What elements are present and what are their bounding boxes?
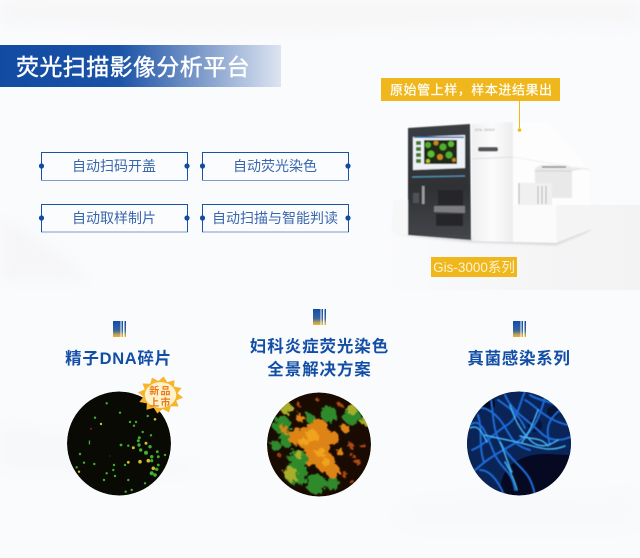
fluorescent micrograph: blue hyphae: [467, 392, 575, 500]
instrument illustration: Gis-3000: [475, 127, 495, 132]
feature box: 自动扫描与智能判读: 自动扫描与智能判读: [212, 210, 338, 226]
fluorescent micrograph: orange and green clusters: [267, 392, 371, 496]
heading: 妇科炎症荧光染色: [250, 336, 389, 356]
feature box: 自动扫码开盖: [39, 152, 190, 180]
feature box: 自动取样制片: [39, 204, 190, 232]
title text: 荧光扫描影像分析平台: [16, 54, 250, 80]
column: 真菌感染系列: [467, 321, 575, 500]
bar icon: [113, 321, 126, 337]
base unit: [513, 205, 557, 243]
left side tray: [392, 200, 408, 235]
fluorescent micrograph: green dots: [67, 392, 171, 496]
sample loader: [518, 165, 590, 205]
badge: 新品上市: 新品: [149, 384, 172, 398]
rear body: [513, 122, 590, 205]
badge: 新品上市: 上市: [149, 396, 172, 409]
bar icon: [313, 309, 326, 325]
badge: 新品上市: [135, 374, 186, 416]
internal chamber: [413, 186, 465, 226]
model label: Gis-3000系列: [433, 260, 515, 275]
heading: 精子DNA碎片: [65, 349, 172, 368]
feature box: 自动取样制片: 自动取样制片: [72, 210, 156, 226]
title banner: [0, 45, 281, 87]
callout label: [381, 78, 560, 101]
column: 妇科炎症荧光染色全景解决方案: [250, 309, 389, 496]
feature box: 自动扫描与智能判读: [200, 204, 351, 232]
instrument shadow: [392, 231, 590, 245]
heading: 全景解决方案: [267, 359, 372, 379]
status strip: [412, 176, 465, 177]
heading: 真菌感染系列: [467, 348, 571, 368]
feature box: 自动扫码开盖: 自动扫码开盖: [72, 158, 156, 174]
bar icon: [513, 321, 526, 337]
display screen: [413, 135, 465, 170]
black front panel: [408, 124, 471, 240]
feature box: 自动荧光染色: 自动荧光染色: [233, 158, 317, 174]
instrument illustration: [392, 122, 600, 245]
white tower: [472, 122, 513, 242]
heading: [250, 336, 389, 379]
callout label: 原始管上样，样本进结果出: [390, 82, 553, 98]
callout connector: [518, 101, 521, 132]
column: 精子DNA碎片: [65, 321, 186, 496]
feature box: 自动荧光染色: [200, 152, 351, 180]
